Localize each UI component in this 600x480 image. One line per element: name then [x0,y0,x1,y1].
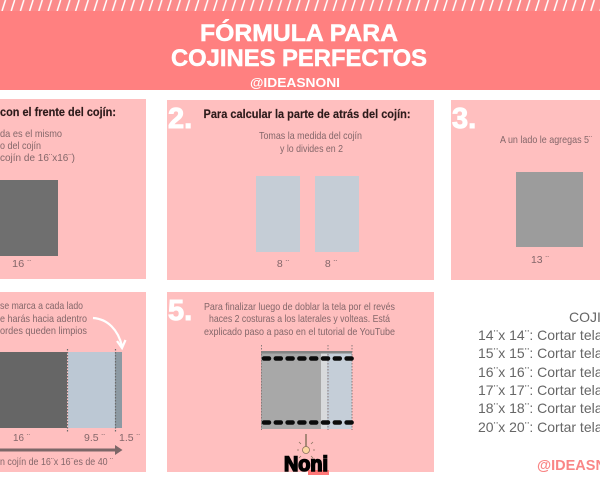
measures [13,432,140,444]
title: FÓRMULA PARA [200,19,398,47]
step 1 heading: con el frente del cojín: [0,107,116,119]
step 1 text: o del cojín [0,140,41,152]
panel: step 1 front [0,99,146,279]
size table: 16¨x 16¨: Cortar tela [478,364,600,380]
step 5 text [204,301,395,338]
panel: step 4 [0,292,146,472]
front fabric rectangle [0,180,58,256]
back measures [277,258,338,270]
measure: 13 ¨ [531,254,550,266]
step 5 text: explicado paso a paso en el tutorial de YouTube [204,326,395,338]
size table: 17¨x 17¨: Cortar tela [478,382,600,398]
measures: 1.5 ¨ [119,432,140,444]
step 2 text [259,130,362,155]
arrow: white curved [93,318,126,348]
sewn cushion diagram [261,345,352,430]
arrow: total width [0,445,122,455]
measures: 9.5 ¨ [84,432,105,444]
step 1 text: cojín de 16¨x16¨) [0,152,75,164]
number 2: 2. [168,103,192,135]
step 5 text: haces 2 costuras a los laterales y volteas. Está [209,313,390,325]
logo: Noni [284,453,328,476]
title: COJINES PERFECTOS [171,45,427,72]
fabric layout [0,349,122,432]
step 2 text: y lo divides en 2 [280,143,343,155]
number 3: 3. [452,103,476,135]
step 1 text: da es el mismo [0,128,62,140]
size table: 20¨x 20¨: Cortar tela [478,419,600,435]
fabric rectangle [516,172,583,247]
size table: 15¨x 15¨: Cortar tela [478,345,600,361]
step 4 text: ordes queden limpios [0,325,87,337]
back measures: 8 ¨ [277,258,290,270]
step 4 text [0,300,87,337]
back fabric pieces [256,176,359,252]
handle: @IDEASNONI [250,76,340,90]
panel: step 5 [167,292,434,476]
step 1 text [0,128,75,164]
step 5 text: Para finalizar luego de doblar la tela por el revés [204,301,395,313]
step 2 heading: Para calcular la parte de atrás del cojín: [204,109,410,121]
step 2 text: Tomas la medida del cojín [259,130,362,142]
title [171,19,427,72]
measures: 16 ¨ [13,432,30,444]
front measure: 16 ¨ [12,258,32,270]
step 4 text: e harás hacia adentro [0,313,87,325]
total text: n cojín de 16¨x 16¨es de 40 ¨ [0,456,113,468]
size table: 14¨x 14¨: Cortar tela [478,327,600,343]
icon: light bulb [297,434,315,458]
panel: step 2 back [167,100,434,280]
step 4 text: se marca a cada lado [0,300,83,312]
number 5: 5. [168,295,192,327]
size table: 18¨x 18¨: Cortar tela [478,400,600,416]
panel: step 3 [451,100,600,280]
header banner [0,11,600,90]
size table [478,309,600,435]
back measures: 8 ¨ [325,258,338,270]
